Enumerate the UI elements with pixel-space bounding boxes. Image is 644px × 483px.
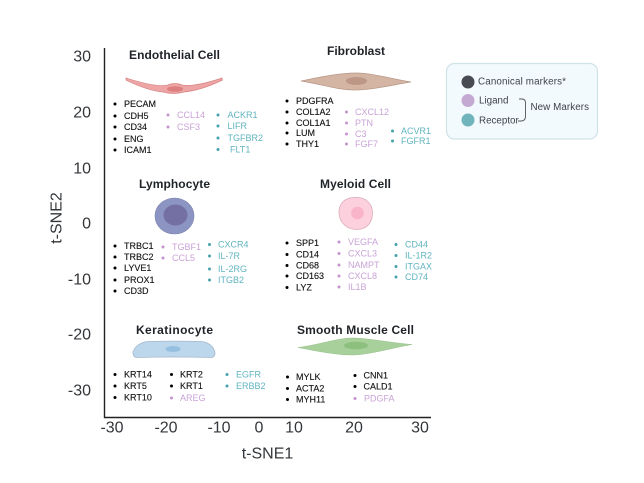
heading: endothelial cell: Endothelial Cell — [129, 48, 220, 62]
ligand markers: IL1B — [348, 282, 367, 292]
x axis title: t-SNE1 — [242, 446, 293, 462]
receptor markers — [216, 110, 263, 154]
canonical markers: column 1: KRT14 — [124, 370, 152, 380]
canonical markers: column 1: ACTA2 — [296, 384, 324, 394]
canonical markers: CD163 — [296, 271, 324, 281]
ligand markers: CCL14 — [177, 110, 205, 120]
heading: keratinocyte: Keratinocyte — [136, 323, 213, 337]
panel: endothelial cell — [114, 48, 263, 155]
canonical markers: column 1: KRT10 — [124, 392, 152, 402]
receptor markers — [391, 126, 431, 146]
canonical markers — [114, 241, 155, 296]
canonical markers: column 2: KRT2 — [180, 370, 203, 380]
ligand markers: VEGFA — [348, 237, 378, 247]
canonical markers: PECAM — [124, 99, 156, 109]
receptor markers: ACKR1 — [228, 110, 258, 120]
panel: fibroblast — [286, 44, 431, 149]
receptor markers: FGFR1 — [401, 136, 431, 146]
ligand markers: CSF3 — [177, 122, 200, 132]
receptor markers: IL-7R — [218, 251, 241, 261]
canonical markers: ICAM1 — [124, 145, 152, 155]
receptor markers: CD44 — [405, 240, 428, 250]
receptor markers: IL-1R2 — [405, 250, 432, 260]
ligand markers — [345, 107, 389, 149]
icon: fibroblast — [301, 73, 411, 90]
y axis tick labels: 10 — [73, 160, 91, 178]
heading: lymphocyte: Lymphocyte — [139, 177, 210, 191]
ligand markers: NAMPT — [348, 260, 380, 270]
canonical markers: THY1 — [296, 139, 319, 149]
panel: myeloid cell — [286, 177, 432, 292]
receptor markers: EGFR — [236, 370, 262, 380]
ligand markers: FGF7 — [355, 139, 378, 149]
canonical markers: CD3D — [124, 286, 149, 296]
ligand markers: C3 — [355, 129, 367, 139]
receptor markers: ITGB2 — [218, 275, 244, 285]
canonical markers: COL1A2 — [296, 107, 331, 117]
x axis tick labels: 20 — [345, 420, 363, 436]
bracket: new markers — [518, 99, 589, 121]
canonical markers: column 1 — [114, 370, 152, 402]
canonical markers: column 1: MYLK — [296, 372, 321, 382]
canonical markers — [286, 96, 334, 149]
x axis tick labels: -20 — [154, 420, 178, 436]
legend: ligand — [462, 94, 508, 107]
canonical markers: CD34 — [124, 122, 147, 132]
heading: myeloid cell: Myeloid Cell — [320, 177, 391, 191]
receptor markers — [226, 370, 266, 391]
receptor markers: FLT1 — [230, 144, 250, 154]
x axis tick labels: -30 — [100, 420, 124, 436]
ligand markers: TGBF1 — [172, 242, 201, 252]
heading: smooth muscle cell: Smooth Muscle Cell — [297, 323, 414, 337]
canonical markers: column 1 — [286, 372, 325, 404]
legend: ligand: Ligand — [479, 96, 508, 106]
canonical markers: column 2: KRT1 — [180, 381, 203, 391]
receptor markers: ITGAX — [405, 262, 432, 272]
canonical markers: COL1A1 — [296, 118, 331, 128]
icon: smooth muscle cell — [298, 338, 412, 355]
canonical markers: SPP1 — [296, 238, 319, 248]
receptor markers — [208, 240, 249, 285]
canonical markers: TRBC2 — [124, 252, 154, 262]
receptor markers: TGFBR2 — [228, 133, 263, 143]
plot axes — [104, 48, 431, 418]
receptor markers: CD74 — [405, 272, 428, 282]
canonical markers — [286, 238, 324, 292]
legend: receptor — [462, 114, 519, 126]
ligand markers — [166, 110, 205, 132]
ligand markers: PTN — [355, 118, 373, 128]
panel: smooth muscle cell — [286, 323, 414, 404]
x axis tick labels: 0 — [255, 420, 264, 436]
icon: keratinocyte — [133, 341, 215, 358]
receptor markers: CXCR4 — [218, 240, 249, 250]
canonical markers: column 2: CNN1 — [364, 370, 388, 380]
y axis tick labels: 30 — [73, 48, 91, 66]
ligand markers: CXCL3 — [348, 248, 377, 258]
canonical markers: CD14 — [296, 250, 319, 260]
y axis title: t-SNE2 — [48, 192, 66, 244]
canonical markers: ENG — [124, 134, 144, 144]
ligand markers — [338, 237, 380, 292]
panel: keratinocyte — [114, 323, 266, 403]
bracket: new markers: New Markers — [530, 102, 589, 113]
canonical markers: CD68 — [296, 260, 319, 270]
canonical markers: LUM — [296, 128, 315, 138]
icon: myeloid cell — [339, 197, 373, 230]
x axis tick labels: 30 — [411, 420, 429, 436]
canonical markers: column 2: CALD1 — [364, 382, 393, 392]
icon: lymphocyte — [155, 198, 194, 234]
canonical markers: TRBC1 — [124, 241, 154, 251]
y axis tick labels: 20 — [73, 104, 91, 122]
y axis tick labels: -10 — [68, 272, 91, 288]
y axis tick labels: -30 — [68, 382, 91, 400]
y axis tick labels: 0 — [82, 216, 91, 232]
canonical markers: column 1: MYH11 — [296, 394, 325, 404]
panel: lymphocyte — [114, 177, 249, 296]
canonical markers: LYZ — [296, 282, 312, 292]
legend: canonical markers: Canonical markers* — [478, 76, 566, 88]
receptor markers: ACVR1 — [401, 126, 431, 136]
canonical markers: column 1: KRT5 — [124, 381, 147, 391]
canonical markers: PROX1 — [124, 275, 155, 285]
ligand markers — [162, 242, 201, 263]
receptor markers: LIFR — [228, 121, 248, 131]
canonical markers — [114, 99, 156, 155]
canonical markers: column 2 — [354, 370, 393, 392]
ligand markers: CXCL8 — [348, 271, 377, 281]
heading: fibroblast: Fibroblast — [327, 44, 385, 58]
y axis tick labels — [68, 48, 91, 400]
legend: receptor: Receptor — [479, 116, 519, 126]
receptor markers — [394, 240, 432, 282]
ligand markers: CXCL12 — [355, 107, 389, 117]
receptor markers: IL-2RG — [218, 264, 247, 274]
receptor markers: ERBB2 — [236, 381, 266, 391]
canonical markers: LYVE1 — [124, 263, 151, 273]
ligand markers: AREG — [180, 393, 206, 403]
ligand markers: CCL5 — [172, 253, 195, 263]
canonical markers: CDH5 — [124, 111, 149, 121]
x axis tick labels: 10 — [285, 420, 303, 436]
x axis tick labels: -10 — [207, 420, 231, 436]
canonical markers: column 2 — [170, 370, 203, 391]
ligand markers: PDGFA — [364, 394, 395, 404]
legend — [446, 64, 598, 139]
icon: endothelial cell — [126, 78, 222, 94]
canonical markers: PDGFRA — [296, 96, 334, 106]
y axis tick labels: -20 — [68, 326, 91, 344]
x axis tick labels — [100, 420, 429, 436]
